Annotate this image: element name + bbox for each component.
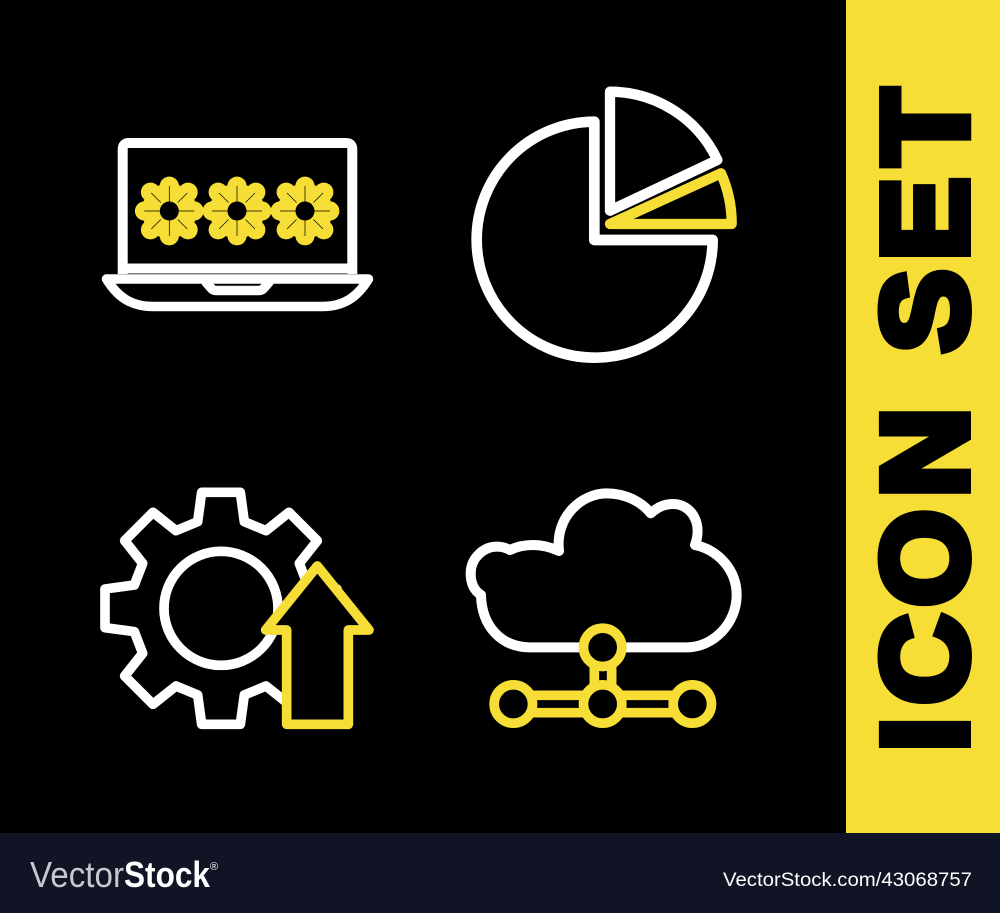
main pie xyxy=(477,122,713,358)
icon: laptop with password xyxy=(106,143,368,306)
gear outline xyxy=(105,492,337,724)
laptop base xyxy=(106,279,368,306)
banner title: ICON SET xyxy=(858,89,993,752)
cloud outline xyxy=(471,493,737,647)
icon: pie chart xyxy=(477,92,732,358)
VectorStock logo: ® xyxy=(210,861,218,873)
laptop screen xyxy=(123,143,352,274)
image id url: VectorStock.com/43068757 xyxy=(723,870,972,891)
icon: gear with up arrow xyxy=(105,492,369,724)
VectorStock logo: VectorStock xyxy=(30,854,222,895)
gear hub xyxy=(164,551,278,665)
footer bar xyxy=(0,833,1000,913)
yellow slice xyxy=(610,173,732,224)
password flowers xyxy=(135,177,339,245)
trackpad notch xyxy=(205,281,270,290)
up arrow xyxy=(266,566,369,724)
white slice xyxy=(610,92,717,211)
network nodes xyxy=(494,628,711,723)
yellow side banner xyxy=(846,0,1000,833)
screen lower bezel xyxy=(122,264,353,274)
network connectors xyxy=(530,663,675,713)
icon: cloud network xyxy=(471,493,737,723)
